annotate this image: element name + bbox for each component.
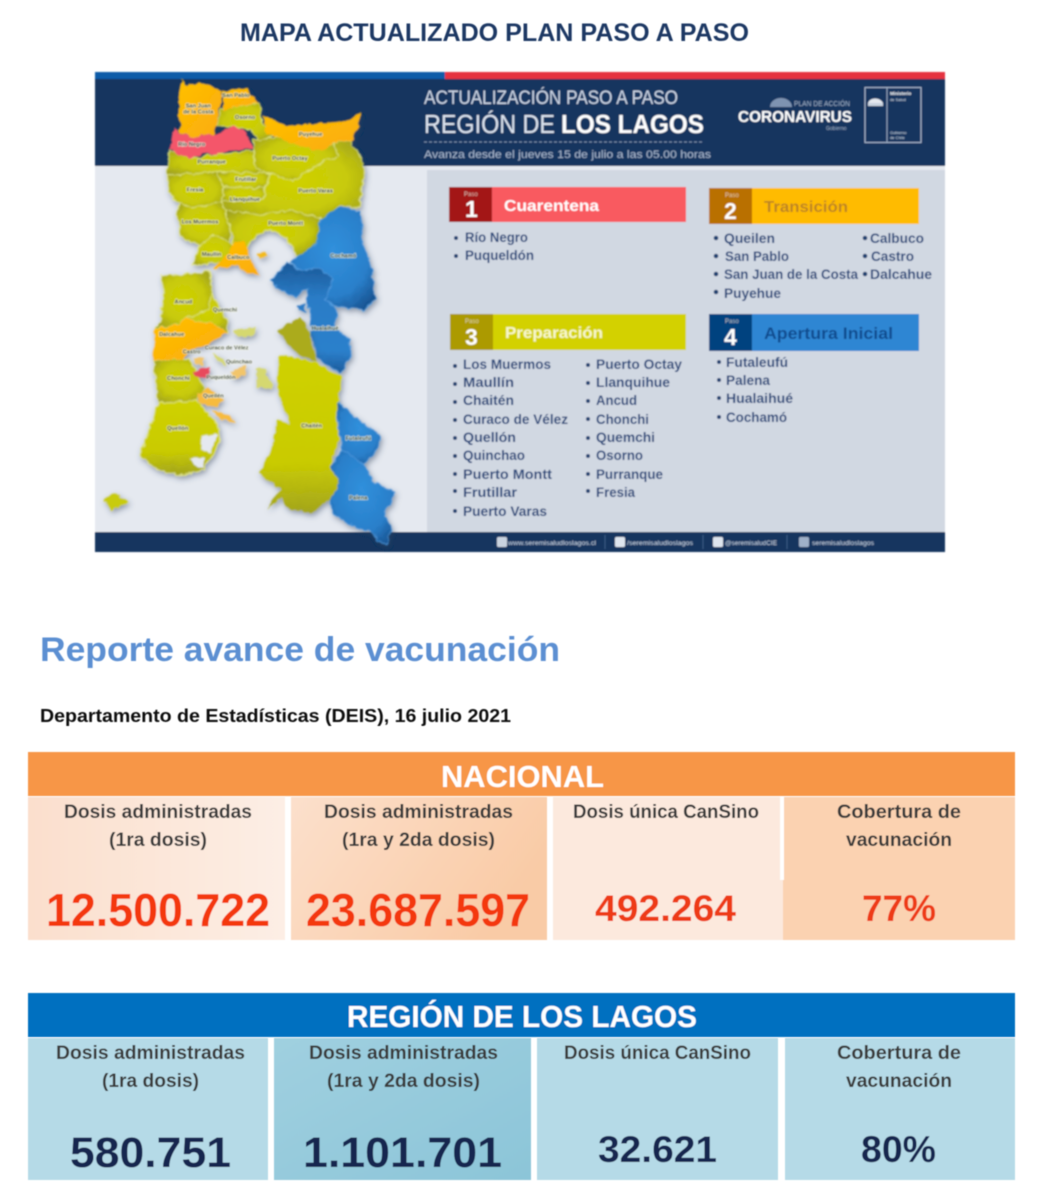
comuna labels north: Cochamó: [330, 253, 357, 259]
comuna labels south: Palena: [349, 495, 368, 501]
card: dosis 1ra y 2da: 1.101.701: [303, 1129, 502, 1177]
footer social links: [497, 535, 874, 549]
comuna labels north: San Pablo: [222, 93, 250, 99]
map shapes: mainland north: [166, 78, 365, 276]
legend: paso 4 apertura inicial: Apertura Inicial: [764, 324, 893, 343]
header title text: [424, 87, 712, 161]
comuna labels north: Calbuco: [227, 255, 250, 261]
list: comunas paso 3: [453, 357, 682, 519]
list: comunas paso 3: Puerto Octay: [596, 357, 682, 372]
legend: paso 4 apertura inicial: 4: [724, 324, 737, 350]
comuna labels north: Puerto Montt: [268, 221, 303, 227]
comuna labels north: Purranque: [198, 159, 226, 165]
card: cobertura: Cobertura de: [837, 802, 961, 823]
footer social links: /seremisaludloslagos: [627, 541, 693, 547]
comuna: Chaitén north: [277, 317, 317, 361]
comuna labels south: Castro: [183, 349, 201, 355]
card: dosis 1ra: 580.751: [70, 1129, 231, 1177]
coronavirus logo: CORONAVIRUS: [738, 109, 852, 126]
list: comunas paso 4: Futaleufú: [726, 355, 788, 370]
comuna labels north: de la Costa: [183, 110, 214, 116]
card: dosis única: 32.621: [598, 1129, 717, 1170]
list: comunas paso 3: Puerto Varas: [463, 504, 547, 519]
coronavirus logo: Gobierno: [826, 126, 847, 132]
comuna: Fresia: [167, 172, 223, 208]
list: comunas paso 3: Purranque: [596, 467, 663, 482]
comuna labels north: Puyehue: [299, 132, 322, 138]
list: comunas paso 3: Ancud: [596, 393, 637, 408]
card: dosis única: [553, 797, 783, 940]
comuna labels south: Hualaihué: [311, 326, 338, 332]
comuna: Frutillar: [217, 172, 270, 188]
legend: paso 2 transición: [709, 188, 919, 224]
comuna labels south: Quinchao: [226, 359, 253, 365]
comuna labels north: Fresia: [187, 188, 204, 194]
comuna labels north: Llanquihue: [230, 197, 260, 203]
card: cobertura: vacunación: [846, 830, 952, 851]
card: dosis única: 492.264: [595, 888, 736, 929]
card: dosis 1ra: (1ra dosis): [109, 830, 207, 851]
comuna: Río Negro: [170, 126, 253, 159]
comuna: San Pablo: [223, 88, 258, 112]
list: comunas paso 1: Puqueldón: [465, 248, 534, 263]
list: comunas paso 3: Quellón: [463, 430, 516, 445]
comuna: Puyehue: [263, 112, 360, 151]
comuna: Palena: [329, 450, 395, 545]
map shapes: Los Lagos cordillera north: [270, 207, 375, 373]
government logo box: de Salud: [890, 97, 906, 102]
list: comunas paso 2: Dalcahue: [870, 267, 933, 282]
card: cobertura: 80%: [861, 1129, 936, 1170]
heading: reporte avance de vacunación: Reporte avance de vacunación: [40, 631, 560, 669]
comuna labels north: Osorno: [235, 115, 256, 121]
map shapes: Chiloé and Palena: [103, 272, 395, 545]
comuna labels south: Queilén: [203, 394, 224, 400]
comuna labels north: Los Muermos: [182, 219, 218, 225]
list: comunas paso 1: [454, 230, 534, 263]
comuna: Quellón: [140, 400, 221, 475]
government logo box: [865, 88, 921, 142]
header: nacional: NACIONAL: [441, 759, 604, 794]
card: cobertura: 77%: [862, 888, 936, 929]
comuna labels south: Quemchi: [213, 308, 238, 314]
card: dosis 1ra y 2da: Dosis administradas: [309, 1043, 498, 1064]
coronavirus logo: PLAN DE ACCIÓN: [794, 99, 850, 108]
legend: paso 1 cuarentena: [449, 187, 686, 222]
legend: paso 4 apertura inicial: [709, 314, 919, 351]
island: Calbuco: [257, 252, 268, 259]
card: dosis única: [537, 1038, 778, 1180]
list: comunas paso 2: [714, 231, 933, 301]
list: comunas paso 3: Llanquihue: [596, 375, 671, 390]
comuna: Osorno: [217, 103, 273, 141]
comuna labels north: Maullín: [202, 252, 222, 258]
legend: paso 3 preparación: [450, 314, 686, 350]
comuna: Chaitén: [260, 355, 342, 513]
card: dosis 1ra y 2da: (1ra y 2da dosis): [342, 830, 495, 851]
card: dosis 1ra y 2da: (1ra y 2da dosis): [327, 1071, 480, 1092]
list: comunas paso 3: Quemchi: [596, 430, 655, 445]
comuna: Maullín: [192, 235, 233, 266]
list: comunas paso 1: Río Negro: [465, 230, 528, 245]
comuna: Guaitecas: [103, 493, 128, 511]
list: comunas paso 3: Los Muermos: [463, 357, 551, 372]
card: cobertura: [780, 797, 1015, 940]
panel background: [95, 72, 945, 552]
card: dosis 1ra y 2da: 23.687.597: [306, 884, 530, 936]
comuna: San Juan de la Costa: [177, 78, 223, 138]
header title text: ACTUALIZACIÓN PASO A PASO: [424, 87, 678, 109]
comuna labels south: Puqueldón: [206, 375, 236, 381]
list: comunas paso 2: Castro: [871, 249, 914, 264]
subheading: fuente DEIS: Departamento de Estadísticas (DEIS), 16 julio 2021: [40, 706, 511, 726]
comuna labels north: Frutillar: [235, 177, 257, 183]
comuna labels north: [178, 93, 357, 261]
legend: paso 3 preparación: Paso: [465, 319, 479, 325]
card: dosis 1ra: [28, 1038, 268, 1180]
list: comunas paso 2: San Juan de la Costa: [724, 267, 858, 282]
list: comunas paso 2: San Pablo: [725, 249, 789, 264]
legend: paso 1 cuarentena: Paso: [464, 192, 478, 198]
comuna: Los Muermos: [177, 202, 230, 245]
comuna: Futaleufú: [337, 403, 382, 464]
legend: paso 2 transición: Paso: [725, 193, 739, 199]
government logo box: Ministerio: [890, 91, 912, 96]
government logo box: de Chile: [890, 135, 905, 140]
comuna labels north: Puerto Varas: [298, 188, 333, 194]
footer social links: www.seremisaludloslagos.cl: [507, 541, 596, 547]
card: dosis 1ra: (1ra dosis): [102, 1071, 199, 1092]
table: región de Los Lagos: [28, 993, 1015, 1180]
list: comunas paso 3: Puerto Montt: [463, 467, 553, 482]
comuna labels south: [159, 299, 372, 501]
card: dosis 1ra: [28, 797, 285, 940]
legend: paso 3 preparación: Preparación: [505, 325, 603, 342]
comuna: Chonchi: [153, 359, 205, 402]
map: región de Los Lagos: [103, 78, 395, 545]
card: dosis 1ra y 2da: Dosis administradas: [324, 802, 513, 823]
list: comunas paso 2: Queilen: [724, 231, 775, 246]
panel: infographic paso a paso: [95, 72, 945, 552]
legend: paso 2 transición: Transición: [764, 199, 848, 216]
header title text: LOS LAGOS: [561, 109, 704, 139]
comuna: Puerto Montt: [225, 210, 320, 256]
comuna labels south: Chaitén: [301, 423, 323, 429]
header band: [95, 72, 945, 166]
card: cobertura: vacunación: [846, 1071, 952, 1092]
header: región: [28, 993, 1015, 1037]
header: nacional: [28, 752, 1015, 796]
card: dosis 1ra: Dosis administradas: [64, 802, 252, 823]
comuna: Hualaihué: [270, 262, 351, 373]
list: comunas paso 3: Curaco de Vélez: [463, 412, 568, 427]
comuna labels south: Futaleufú: [346, 436, 372, 442]
card: dosis 1ra y 2da: [291, 797, 547, 940]
list: comunas paso 2: Puyehue: [724, 286, 781, 301]
legend: paso 1 cuarentena: 1: [465, 196, 478, 222]
list: comunas paso 3: Fresia: [596, 485, 635, 500]
list: comunas paso 4: Palena: [726, 373, 770, 388]
legend: paso 2 transición: 2: [724, 198, 737, 224]
comuna: Purranque: [166, 150, 270, 175]
comuna labels south: Curaco de Vélez: [205, 345, 249, 351]
coronavirus logo: [738, 98, 852, 132]
island: Hualaihué: [296, 302, 307, 313]
list: comunas paso 4: [717, 355, 794, 425]
comuna: Ancud: [155, 272, 212, 328]
list: comunas paso 3: Osorno: [596, 448, 643, 463]
islands: [190, 327, 273, 468]
comuna labels north: Río Negro: [178, 142, 206, 148]
legend: paso 3 preparación: 3: [465, 324, 478, 350]
list: comunas paso 3: Quinchao: [463, 448, 525, 463]
list: comunas paso 3: Maullín: [463, 375, 514, 390]
comuna: Quemchi: [185, 293, 227, 332]
header title text: REGIÓN DE: [424, 109, 555, 139]
list: comunas paso 3: Chaitén: [463, 393, 514, 408]
comuna: Puerto Varas: [222, 141, 365, 222]
title: MAPA ACTUALIZADO PLAN PASO A PASO: [240, 19, 749, 47]
comuna labels south: Chonchi: [167, 376, 190, 382]
header title text: Avanza desde el jueves 15 de julio a las 05.00 horas: [424, 149, 712, 161]
legend: paso 4 apertura inicial: Paso: [725, 319, 739, 325]
card: dosis 1ra: Dosis administradas: [56, 1043, 245, 1064]
table: nacional: [28, 752, 1015, 940]
comuna: Calbuco: [213, 242, 260, 276]
comuna: Puqueldón: [193, 368, 210, 379]
legend: paso 1 cuarentena: Cuarentena: [504, 198, 599, 215]
comuna: Cochamó: [290, 207, 375, 310]
card: dosis 1ra y 2da: [274, 1038, 531, 1180]
footer social links: @seremisaludCIE: [725, 541, 777, 547]
comuna: Dalcahue and Castro: [153, 317, 227, 361]
card: dosis única: Dosis única CanSino: [573, 802, 759, 823]
footer band: [95, 532, 945, 552]
footer social links: seremisaludloslagos: [812, 541, 874, 547]
card: cobertura: [785, 1038, 1015, 1180]
card: cobertura: Cobertura de: [837, 1043, 961, 1064]
comuna labels north: Puerto Octay: [272, 156, 308, 162]
comuna labels south: Dalcahue: [159, 332, 184, 338]
comuna labels south: Quellón: [167, 426, 189, 432]
list: comunas paso 3: Chonchi: [596, 412, 649, 427]
list: comunas paso 4: Hualaihué: [726, 391, 794, 406]
card: dosis 1ra: 12.500.722: [46, 884, 270, 936]
header: región: REGIÓN DE LOS LAGOS: [347, 998, 697, 1034]
comuna labels south: Ancud: [175, 299, 193, 305]
comuna: Llanquihue: [222, 187, 265, 202]
right legend panel background: [427, 170, 945, 532]
comuna labels north: San Juan: [186, 104, 211, 110]
list: comunas paso 2: Calbuco: [870, 231, 924, 246]
list: comunas paso 4: Cochamó: [726, 410, 787, 425]
government logo box: Gobierno: [890, 130, 907, 135]
comuna: Puerto Octay: [253, 137, 338, 182]
card: dosis única: Dosis única CanSino: [564, 1043, 751, 1064]
list: comunas paso 3: Frutillar: [463, 485, 518, 500]
